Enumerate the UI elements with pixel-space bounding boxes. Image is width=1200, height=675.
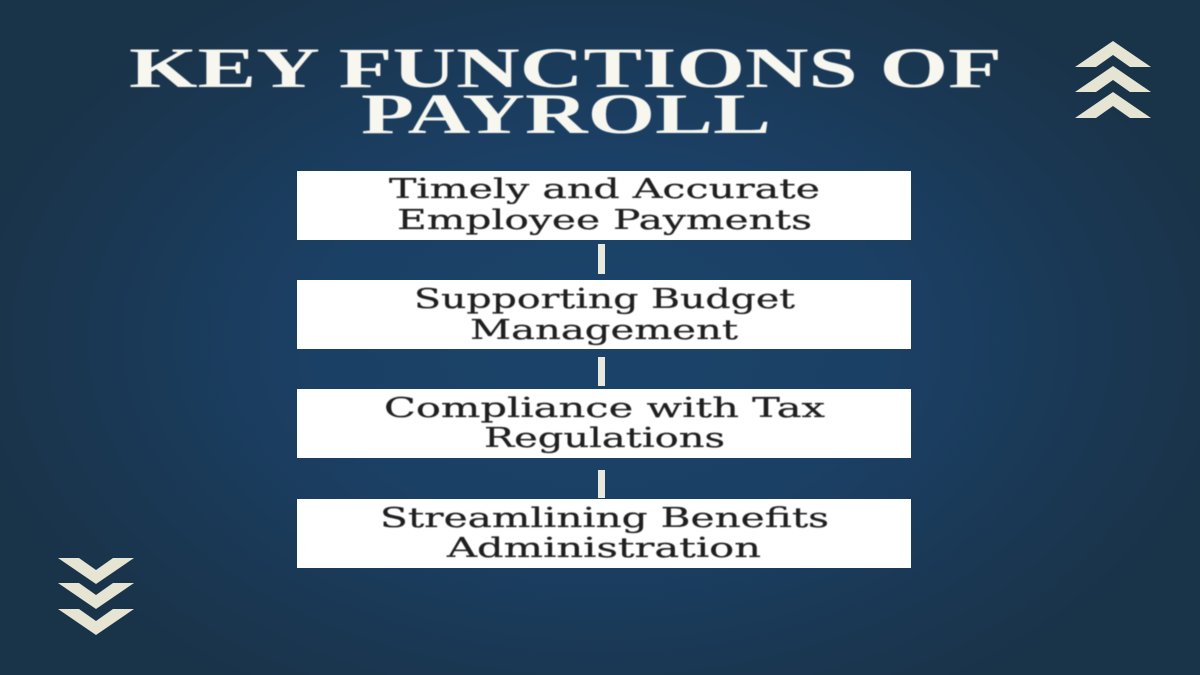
title [129, 37, 1002, 146]
connector 2 [598, 357, 605, 386]
box: benefits administration: Administration [445, 533, 761, 564]
icon: up chevrons [1075, 41, 1151, 118]
box: budget management: Supporting Budget [414, 284, 795, 315]
box: benefits administration: Streamlining Benefits [380, 503, 829, 534]
box: timely payments: Timely and Accurate [389, 174, 820, 205]
box: tax compliance [297, 389, 911, 458]
icon: down chevrons [58, 558, 134, 635]
box: timely payments [297, 171, 911, 240]
connector 3 [598, 470, 605, 498]
box: budget management: Management [470, 315, 738, 346]
title: PAYROLL [361, 83, 771, 146]
box: tax compliance: Regulations [484, 423, 725, 454]
box: timely payments: Employee Payments [397, 205, 812, 236]
box: benefits administration [297, 499, 911, 568]
box: tax compliance: Compliance with Tax [384, 393, 825, 424]
connector 1 [598, 244, 605, 274]
title: KEY FUNCTIONS OF [129, 37, 1002, 100]
box: budget management [297, 280, 911, 349]
